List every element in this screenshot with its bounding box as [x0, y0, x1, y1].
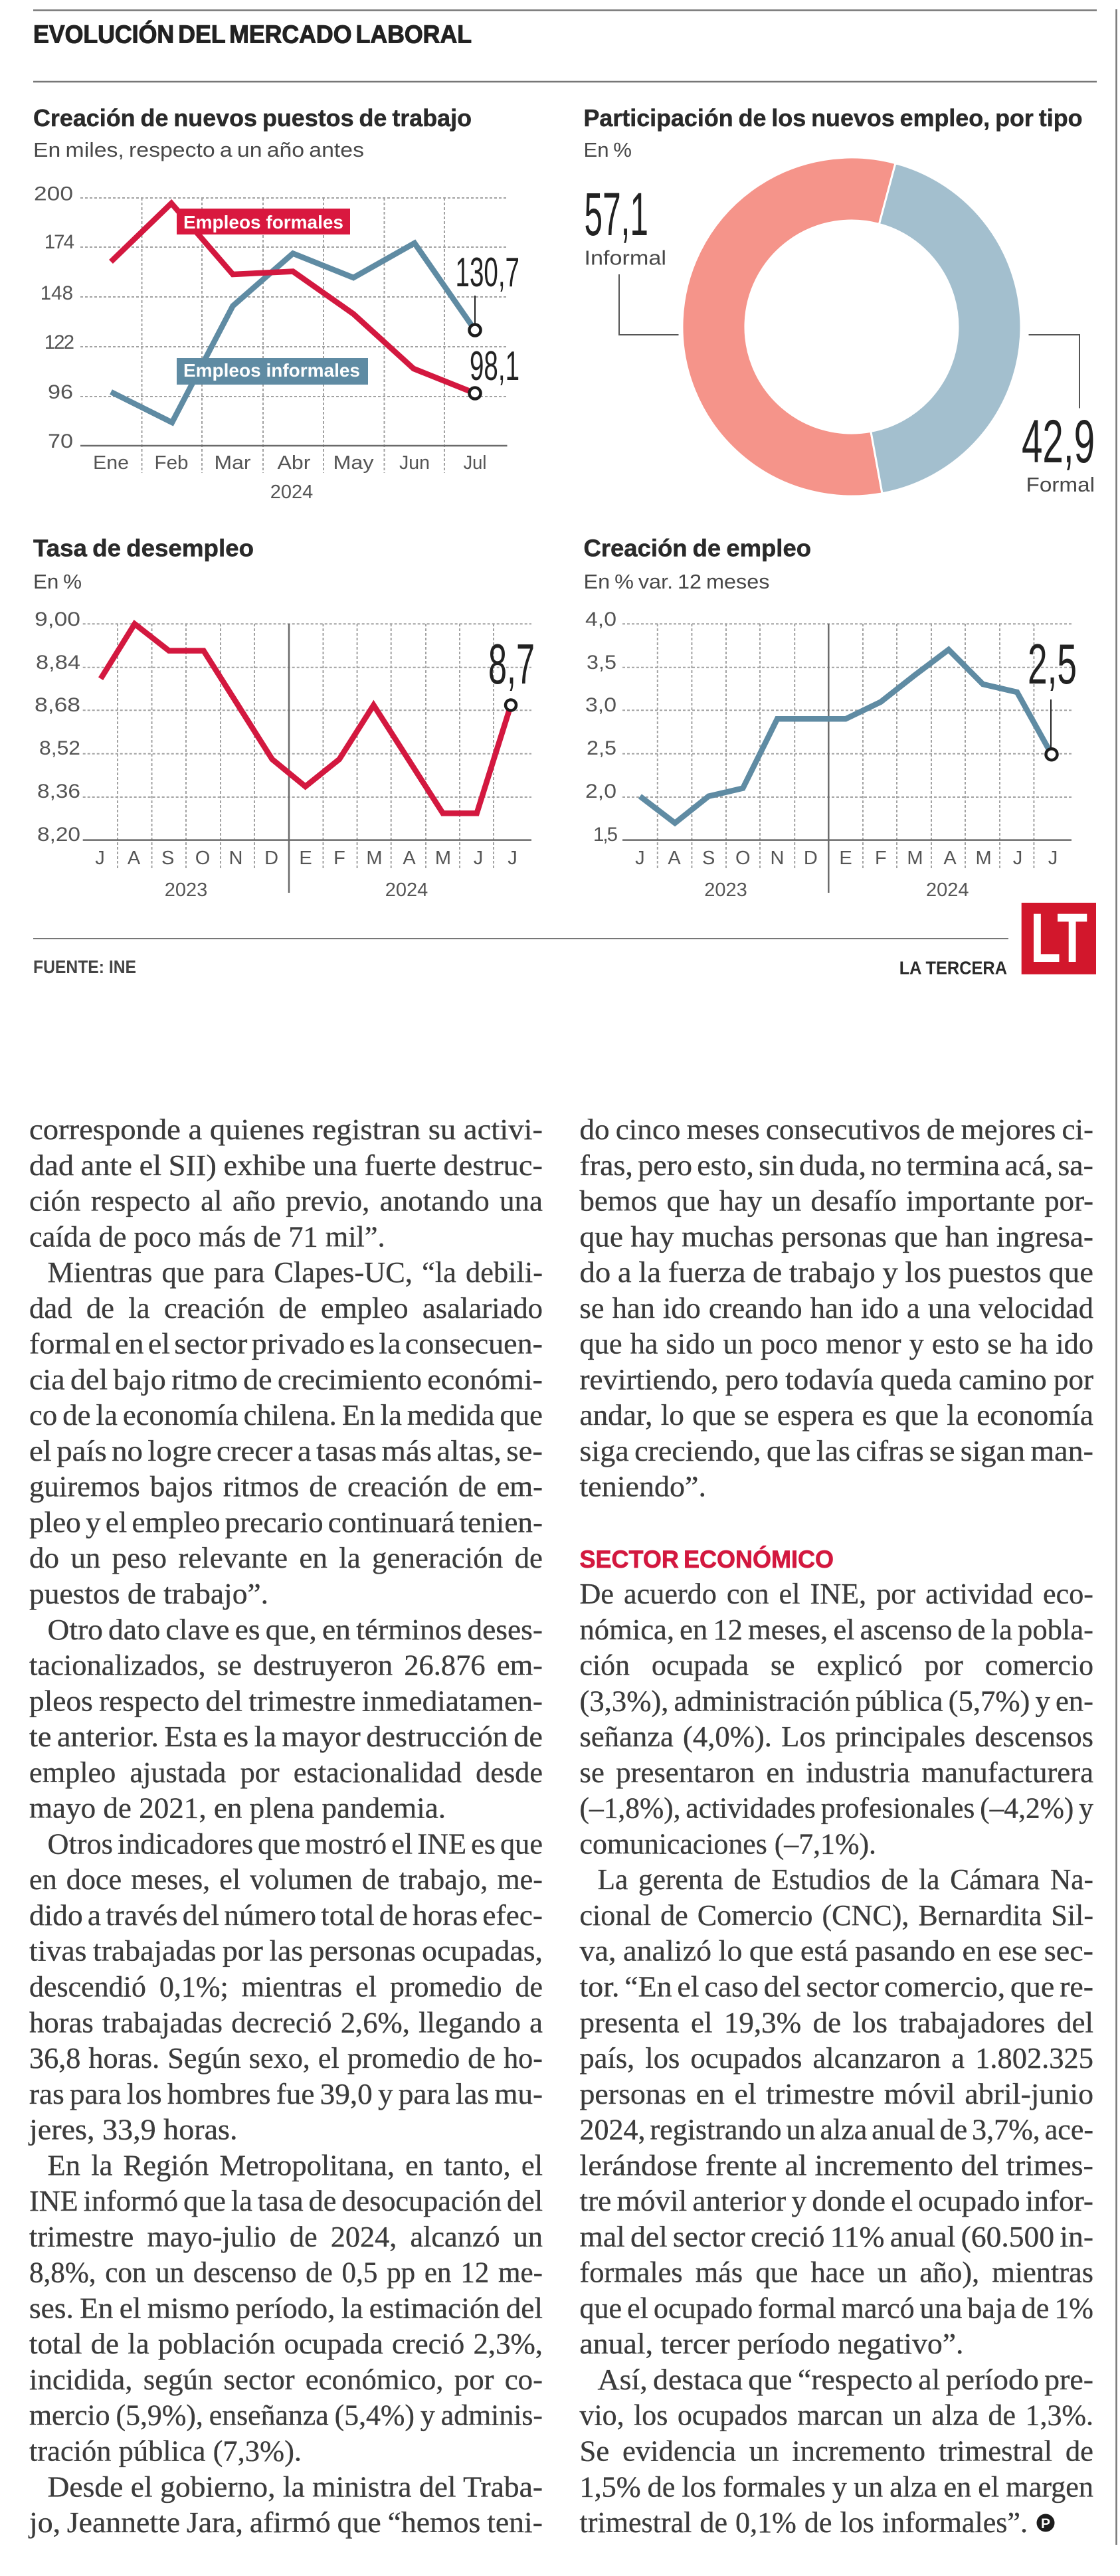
- paragraph: Clapes-UC: pleo y el empleo precario continuará tenien-: [29, 1507, 543, 1538]
- paragraph: CNC: tor. “En el caso del sector comercio, que re-: [579, 1970, 1093, 2003]
- paragraph: closing: [579, 2363, 1093, 2539]
- y axis labels: 70: [48, 430, 73, 452]
- y axis labels: [34, 183, 74, 452]
- y axis labels: 2,5: [587, 737, 616, 759]
- x axis labels: A: [403, 848, 416, 869]
- callout: informal: Informal: [585, 246, 666, 270]
- heading: share: Participación de los nuevos empleo, por tipo: [583, 104, 1083, 132]
- paragraph: CNC: mal del sector creció 11% anual (60.500 in-: [579, 2221, 1093, 2253]
- subtitle: unemployment: En %: [33, 570, 82, 593]
- paragraph: economic activity: [579, 1578, 1093, 1860]
- x axis labels: F: [333, 848, 345, 869]
- paragraph: Independent workers: ción respecto al año previo, anotando una: [29, 1185, 543, 1217]
- x axis labels: M: [435, 848, 451, 869]
- paragraph: closing: Se evidencia un incremento trimestral de: [579, 2435, 1093, 2467]
- paragraph: CNC: La gerenta de Estudios de la Cámara Na-: [598, 1863, 1093, 1896]
- paragraph: economic activity: De acuerdo con el INE, por actividad eco-: [579, 1578, 1093, 1610]
- x axis labels: Mar: [214, 452, 251, 474]
- paragraph: CNC: anual, tercer período negativo”.: [579, 2328, 963, 2360]
- x axis labels: A: [668, 848, 681, 869]
- heading: new jobs: Creación de nuevos puestos de trabajo: [33, 104, 472, 132]
- paragraph: Independent workers: caída de poco más de 71 mil”.: [29, 1220, 385, 1253]
- paragraph: Independent workers: [29, 1113, 543, 1253]
- paragraph: CNC: [579, 1863, 1093, 2360]
- subtitle: share: En %: [583, 138, 632, 161]
- paragraph: CNC: formales más que hace un año), mientras: [579, 2256, 1093, 2289]
- paragraph: other indicators: tivas trabajadas por las personas ocupadas,: [29, 1935, 543, 1968]
- callout: formal: Formal: [1026, 473, 1095, 496]
- callout: informal: [585, 181, 679, 335]
- x axis labels: N: [771, 848, 784, 869]
- paragraph: Metropolitan Region: trimestre mayo-julio de 2024, alcanzó un: [29, 2221, 543, 2253]
- x axis labels: 2024: [270, 482, 313, 503]
- paragraph: minister quote: bemos que hay un desafío importante por-: [579, 1185, 1093, 1217]
- paragraph: economic activity: señanza (4,0%). Los principales descensos: [579, 1720, 1093, 1753]
- paragraph: minister quote: que hay muchas personas que han ingresa-: [579, 1220, 1093, 1253]
- panel: unemployment rate chart: [33, 534, 535, 901]
- paragraph: Clapes-UC: guiremos bajos ritmos de creación de em-: [29, 1471, 543, 1503]
- y axis labels: [585, 608, 618, 846]
- paragraph: minister quote: que ha sido un poco menor y esto se ha ido: [579, 1328, 1093, 1360]
- paragraph: CNC: que el ocupado formal marcó una baja de 1%: [579, 2292, 1093, 2324]
- paragraph: minister quote: revirtiendo, pero todavía queda camino por: [579, 1363, 1093, 1396]
- paragraph: CNC: va, analizó lo que está pasando en ese sec-: [579, 1935, 1093, 1968]
- paragraph: minister quote: [579, 1113, 1093, 1503]
- x axis labels: D: [264, 848, 278, 869]
- y axis labels: 148: [41, 282, 73, 304]
- x axis labels: Jul: [464, 452, 486, 474]
- callout: formal: [1022, 335, 1095, 496]
- paragraph: closing: 1,5% de los formales y un alza en el margen: [579, 2470, 1093, 2503]
- line: unemployment: [101, 624, 511, 813]
- line: employment: [640, 650, 1052, 823]
- x axis labels: [95, 848, 517, 901]
- paragraph: seasonally adjusted: Otro dato clave es que, en términos deses-: [48, 1613, 543, 1646]
- paragraph: economic activity: nómica, en 12 meses, el ascenso de la pobla-: [579, 1613, 1093, 1646]
- x axis labels: N: [229, 848, 242, 869]
- paragraph: Clapes-UC: do un peso relevante en la generación de: [29, 1542, 543, 1574]
- paragraph: government: Desde el gobierno, la ministra del Traba-: [48, 2470, 543, 2503]
- paragraph: other indicators: 36,8 horas. Según sexo, el promedio de ho-: [29, 2042, 543, 2074]
- y axis labels: 9,00: [35, 608, 80, 630]
- label: formal jobs: Empleos formales: [183, 212, 343, 232]
- paragraph: economic activity: se presentaron en industria manufacturera: [579, 1756, 1093, 1789]
- x axis labels: A: [943, 848, 957, 869]
- y axis labels: 8,52: [39, 737, 80, 759]
- paragraph: Metropolitan Region: total de la población ocupada creció 2,3%,: [29, 2328, 543, 2360]
- segment: informal: [682, 157, 895, 496]
- y axis labels: 8,68: [35, 694, 80, 716]
- paragraph: closing: trimestral de 0,1% de los informales”.: [579, 2506, 1028, 2539]
- callout: 98,1: 98,1: [470, 343, 519, 389]
- paragraph: Metropolitan Region: INE informó que la tasa de desocupación del: [29, 2185, 543, 2217]
- subtitle: employment: En % var. 12 meses: [583, 570, 769, 593]
- paragraph: Clapes-UC: cia del bajo ritmo de crecimiento económi-: [29, 1363, 543, 1396]
- icon: end mark: P: [1041, 2516, 1050, 2531]
- x axis labels: O: [735, 848, 751, 869]
- x axis labels: Abr: [278, 452, 311, 474]
- paragraph: minister quote: teniendo”.: [579, 1471, 706, 1503]
- article: left column: [28, 1113, 543, 2539]
- paragraph: seasonally adjusted: [29, 1613, 543, 1825]
- x axis labels: M: [366, 848, 382, 869]
- paragraph: closing: Así, destaca que “respecto al período pre-: [598, 2363, 1093, 2396]
- paragraph: Metropolitan Region: En la Región Metropolitana, en tanto, el: [48, 2149, 543, 2181]
- paragraph: CNC: cional de Comercio (CNC), Bernardita Sil-: [579, 1899, 1093, 1932]
- donut chart: [682, 157, 1021, 496]
- paragraph: minister quote: siga creciendo, que las cifras se sigan man-: [579, 1435, 1093, 1467]
- x axis labels: J: [474, 848, 483, 869]
- paragraph: Clapes-UC: co de la economía chilena. En la medida que: [29, 1399, 543, 1431]
- x axis labels: J: [508, 848, 517, 869]
- paragraph: other indicators: descendió 0,1%; mientras el promedio de: [29, 1970, 543, 2003]
- y axis labels: 200: [34, 183, 73, 205]
- label: informal jobs: Empleos informales: [183, 360, 360, 381]
- x axis labels: [93, 452, 486, 503]
- paragraph: Clapes-UC: Mientras que para Clapes-UC, “la debili-: [48, 1256, 543, 1289]
- paragraph: CNC: lerándose frente al incremento del trimes-: [579, 2149, 1093, 2181]
- paragraph: Independent workers: corresponde a quienes registran su activi-: [29, 1113, 543, 1146]
- paragraph: Metropolitan Region: [29, 2149, 543, 2467]
- y axis labels: 2,0: [585, 781, 616, 802]
- icon: end mark: [1036, 2514, 1055, 2532]
- heading: unemployment: Tasa de desempleo: [33, 534, 254, 562]
- x axis labels: S: [161, 848, 174, 869]
- paragraph: Metropolitan Region: ses. En el mismo período, la estimación del: [29, 2292, 543, 2324]
- x axis labels: S: [702, 848, 715, 869]
- x axis labels: Ene: [93, 452, 129, 474]
- paragraph: economic activity: comunicaciones (–7,1%).: [579, 1827, 876, 1860]
- x axis labels: Feb: [154, 452, 189, 474]
- paragraph: Metropolitan Region: tración pública (7,3%).: [29, 2435, 302, 2467]
- segment: formal: [871, 163, 1021, 494]
- paragraph: Clapes-UC: [29, 1256, 543, 1610]
- panel: donut share by type: [583, 104, 1095, 496]
- x axis labels: J: [635, 848, 645, 869]
- paragraph: seasonally adjusted: mayo de 2021, en plena pandemia.: [29, 1792, 446, 1825]
- x axis labels: May: [333, 452, 374, 474]
- line: informal jobs: [111, 243, 475, 422]
- paragraph: other indicators: horas trabajadas decreció 2,6%, llegando a: [29, 2006, 543, 2039]
- y axis labels: 8,20: [37, 824, 80, 846]
- paragraph: Independent workers: dad ante el SII) exhibe una fuerte destruc-: [29, 1149, 543, 1182]
- paragraph: minister quote: se han ido creando han ido a una velocidad: [579, 1292, 1093, 1325]
- y axis labels: 8,36: [37, 781, 80, 802]
- paragraph: CNC: tre móvil anterior y donde el ocupado infor-: [579, 2185, 1093, 2217]
- x axis labels: 2023: [165, 879, 207, 901]
- paragraph: other indicators: dido a través del número total de horas efec-: [29, 1899, 543, 1932]
- paragraph: seasonally adjusted: empleo ajustada por estacionalidad desde: [29, 1756, 543, 1789]
- x axis labels: E: [299, 848, 312, 869]
- paragraph: minister quote: fras, pero esto, sin duda, no termina acá, sa-: [579, 1149, 1093, 1182]
- callout: 98,1: [469, 343, 519, 399]
- callout: informal: 57,1: [585, 181, 648, 248]
- paragraph: Metropolitan Region: mercio (5,9%), enseñanza (5,4%) y adminis-: [29, 2399, 543, 2432]
- y axis labels: 4,0: [585, 608, 616, 630]
- panel: job creation line chart: [33, 104, 519, 503]
- heading: employment: Creación de empleo: [583, 534, 811, 562]
- x axis labels: A: [128, 848, 141, 869]
- paragraph: CNC: presenta el 19,3% de los trabajadores del: [579, 2006, 1093, 2039]
- y axis labels: 3,5: [587, 652, 616, 674]
- x axis labels: J: [1048, 848, 1058, 869]
- paragraph: minister quote: andar, lo que se espera es que la economía: [579, 1399, 1093, 1431]
- callout: 8,7: 8,7: [488, 633, 535, 696]
- paragraph: economic activity: (3,3%), administración pública (5,7%) y en-: [579, 1685, 1093, 1717]
- x axis labels: 2024: [926, 879, 969, 901]
- y axis labels: 96: [48, 381, 73, 403]
- paragraph: other indicators: jeres, 33,9 horas.: [28, 2114, 237, 2146]
- callout: 130,7: 130,7: [456, 250, 519, 296]
- callout: 2,5: 2,5: [1028, 633, 1077, 696]
- source: FUENTE: INE: [33, 957, 136, 977]
- paragraph: economic activity: ción ocupada se explicó por comercio: [579, 1649, 1093, 1682]
- paragraph: closing: vio, los ocupados marcan un alza de 1,3%.: [579, 2399, 1093, 2432]
- callout: 8,7: [488, 633, 535, 711]
- paragraph: Clapes-UC: formal en el sector privado es la consecuen-: [29, 1328, 543, 1360]
- paragraph: Clapes-UC: puestos de trabajo”.: [29, 1578, 268, 1610]
- x axis labels: M: [907, 848, 923, 869]
- paragraph: Clapes-UC: el país no logre crecer a tasas más altas, se-: [29, 1435, 543, 1467]
- paragraph: economic activity: (–1,8%), actividades profesionales (–4,2%) y: [579, 1792, 1093, 1825]
- logo: LT: LT: [1030, 899, 1087, 977]
- paragraph: seasonally adjusted: te anterior. Esta es la mayor destrucción de: [29, 1720, 543, 1753]
- x axis labels: D: [804, 848, 818, 869]
- paragraph: CNC: país, los ocupados alcanzaron a 1.802.325: [579, 2042, 1093, 2074]
- x axis labels: E: [839, 848, 852, 869]
- x axis labels: F: [875, 848, 887, 869]
- x axis labels: 2023: [704, 879, 747, 901]
- subtitle: new jobs: En miles, respecto a un año antes: [33, 138, 364, 161]
- x axis labels: [635, 848, 1058, 901]
- paragraph: seasonally adjusted: pleos respecto del trimestre inmediatamen-: [29, 1685, 543, 1717]
- x axis labels: 2024: [385, 879, 428, 901]
- paragraph: other indicators: ras para los hombres fue 39,0 y para las mu-: [29, 2078, 543, 2110]
- x axis labels: J: [1013, 848, 1022, 869]
- line: formal jobs: [111, 203, 475, 393]
- callout: 2,5: [1028, 633, 1077, 760]
- paragraph: government: jo, Jeannette Jara, afirmó que “hemos teni-: [28, 2506, 543, 2539]
- y axis labels: 3,0: [585, 694, 616, 716]
- panel: employment creation chart: [583, 534, 1077, 901]
- callout: 130,7: [456, 250, 519, 336]
- paragraph: minister quote: do a la fuerza de trabajo y los puestos que: [579, 1256, 1093, 1289]
- paragraph: government: [28, 2470, 543, 2539]
- paragraph: CNC: personas en el trimestre móvil abril-junio: [579, 2078, 1093, 2110]
- paragraph: other indicators: [28, 1827, 543, 2146]
- y axis labels: 1,5: [593, 824, 618, 846]
- x axis labels: O: [195, 848, 210, 869]
- paragraph: minister quote: do cinco meses consecutivos de mejores ci-: [579, 1113, 1093, 1146]
- x axis labels: M: [976, 848, 992, 869]
- y axis labels: 122: [45, 331, 74, 353]
- paragraph: seasonally adjusted: tacionalizados, se destruyeron 26.876 em-: [29, 1649, 543, 1682]
- section heading: SECTOR ECONÓMICO: [579, 1545, 834, 1573]
- y axis labels: [35, 608, 80, 846]
- x axis labels: Jun: [399, 452, 430, 474]
- y axis labels: 174: [45, 231, 74, 253]
- article: right column: [579, 1113, 1093, 2539]
- paragraph: Metropolitan Region: 8,8%, con un descenso de 0,5 pp en 12 me-: [29, 2256, 543, 2289]
- paragraph: other indicators: Otros indicadores que mostró el INE es que: [48, 1827, 543, 1860]
- x axis labels: J: [95, 848, 105, 869]
- title: EVOLUCIÓN DEL MERCADO LABORAL: [33, 20, 472, 49]
- y axis labels: 8,84: [36, 652, 80, 674]
- paragraph: CNC: 2024, registrando un alza anual de 3,7%, ace-: [579, 2114, 1093, 2146]
- brand name: LA TERCERA: [899, 958, 1007, 978]
- paragraph: Clapes-UC: dad de la creación de empleo asalariado: [29, 1292, 543, 1325]
- paragraph: Metropolitan Region: incidida, según sector económico, por co-: [29, 2363, 543, 2396]
- paragraph: other indicators: en doce meses, el volumen de trabajo, me-: [29, 1863, 543, 1896]
